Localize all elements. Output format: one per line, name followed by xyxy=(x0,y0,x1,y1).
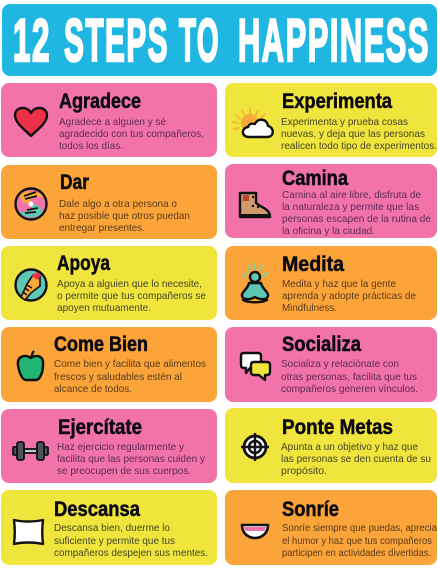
panel: Sonríe: Sonríe xyxy=(282,498,339,521)
panel: Camina: Camina xyxy=(282,167,348,190)
panel: Ejercítate xyxy=(1,409,217,483)
description xyxy=(57,279,206,314)
icon: smiling mouth xyxy=(242,525,268,538)
description xyxy=(54,359,206,395)
description: se preocupen de sus cuerpos. xyxy=(57,466,191,477)
panel: Come Bien: Come Bien xyxy=(54,333,148,356)
description: facilita que las personas cuiden y xyxy=(57,454,206,465)
panel: Descansa: Descansa xyxy=(54,498,140,521)
description xyxy=(282,279,416,314)
description xyxy=(57,442,206,477)
panel: Experimenta: Experimenta xyxy=(282,90,392,113)
icon: chat bubbles xyxy=(241,353,270,380)
description: Descansa bien, duerme lo xyxy=(54,523,170,534)
icon: helping hands xyxy=(16,270,46,300)
description: alcance de todos. xyxy=(54,384,132,395)
description: Mindfulness. xyxy=(282,303,337,314)
description xyxy=(59,199,190,234)
description: otras personas, facilita que tus xyxy=(281,372,417,383)
icon: target xyxy=(241,433,269,461)
description: el humor y haz que tus compañeros xyxy=(282,536,432,547)
panel: Agradece xyxy=(1,83,217,157)
title xyxy=(13,7,430,74)
description: participen en actividades divertidas. xyxy=(282,548,431,559)
description xyxy=(281,359,418,395)
panel: Ejercítate: Ejercítate xyxy=(58,416,142,439)
description: Haz ejercicio regularmente y xyxy=(57,442,185,453)
description: Dale algo a otra persona o xyxy=(59,199,177,210)
description: frescos y saludables estén al xyxy=(54,372,182,383)
description: apoyen mutuamente. xyxy=(57,303,151,314)
icon: sun and cloud xyxy=(233,108,273,137)
description: todos los días. xyxy=(59,141,123,152)
title: TO xyxy=(179,7,220,74)
panel: Experimenta xyxy=(225,83,437,157)
title: STEPS xyxy=(64,7,169,74)
description: nuevas, y deja que las personas xyxy=(281,129,425,140)
panel: Socializa: Socializa xyxy=(282,333,361,356)
description xyxy=(282,523,437,559)
panel: Camina xyxy=(225,164,437,238)
panel: Ponte Metas xyxy=(225,408,437,483)
description: Socializa y relaciónate con xyxy=(281,359,399,370)
panel: Medita xyxy=(225,246,437,320)
icon: apple xyxy=(18,351,43,380)
description: realicen todo tipo de experimentos. xyxy=(281,141,437,152)
description: compañeros generen vínculos. xyxy=(281,384,418,395)
description: entregar presentes. xyxy=(59,223,145,234)
icon: heart xyxy=(15,108,47,136)
description: Apunta a un objetivo y haz que xyxy=(281,442,418,453)
panel: Dar: Dar xyxy=(60,171,89,194)
description: Apoya a alguien que lo necesite, xyxy=(57,279,202,290)
icon: pillow xyxy=(14,520,43,544)
description: la naturaleza y permite que las xyxy=(282,202,419,213)
header banner xyxy=(2,4,437,76)
description: aprenda y adopte prácticas de xyxy=(282,291,416,302)
panel: Agradece: Agradece xyxy=(59,90,141,113)
description: las personas se den cuenta de su xyxy=(281,454,431,465)
icon: dumbbell xyxy=(13,442,48,460)
description xyxy=(54,523,208,559)
description: Come bien y facilita que alimentos xyxy=(54,359,206,370)
description: Experimenta y prueba cosas xyxy=(281,117,408,128)
description: haz posible que otros puedan xyxy=(59,211,190,222)
description xyxy=(59,117,204,152)
panel: Sonríe xyxy=(225,490,437,565)
description: Medita y haz que la gente xyxy=(282,279,396,290)
description xyxy=(281,442,431,477)
description: agradecido con tus compañeros, xyxy=(59,129,204,140)
panel: Ponte Metas: Ponte Metas xyxy=(282,416,393,439)
panel: Apoya: Apoya xyxy=(57,252,110,275)
description xyxy=(281,117,437,152)
description: la oficina y la ciudad. xyxy=(282,226,375,237)
panel: Socializa xyxy=(225,327,437,402)
title: 12 xyxy=(13,7,51,74)
icon: boot xyxy=(240,193,271,218)
panel: Dar xyxy=(1,165,217,239)
description: propósito. xyxy=(281,466,327,477)
panel: Apoya xyxy=(1,246,217,320)
icon: meditating person xyxy=(242,264,268,302)
icon: giving hands xyxy=(16,188,46,220)
description: Agradece a alguien y sé xyxy=(59,117,166,128)
panel: Descansa xyxy=(1,490,217,565)
description: o permite que tus compañeros se xyxy=(57,291,206,302)
description: suficiente y permite que tus xyxy=(54,536,175,547)
description: personas escapen de la rutina de xyxy=(282,214,431,225)
panel: Come Bien xyxy=(1,327,217,402)
description: Camina al aire libre, disfruta de xyxy=(282,190,421,201)
panel: Medita: Medita xyxy=(282,253,344,276)
description xyxy=(282,190,431,237)
description: compañeros despejen sus mentes. xyxy=(54,548,208,559)
